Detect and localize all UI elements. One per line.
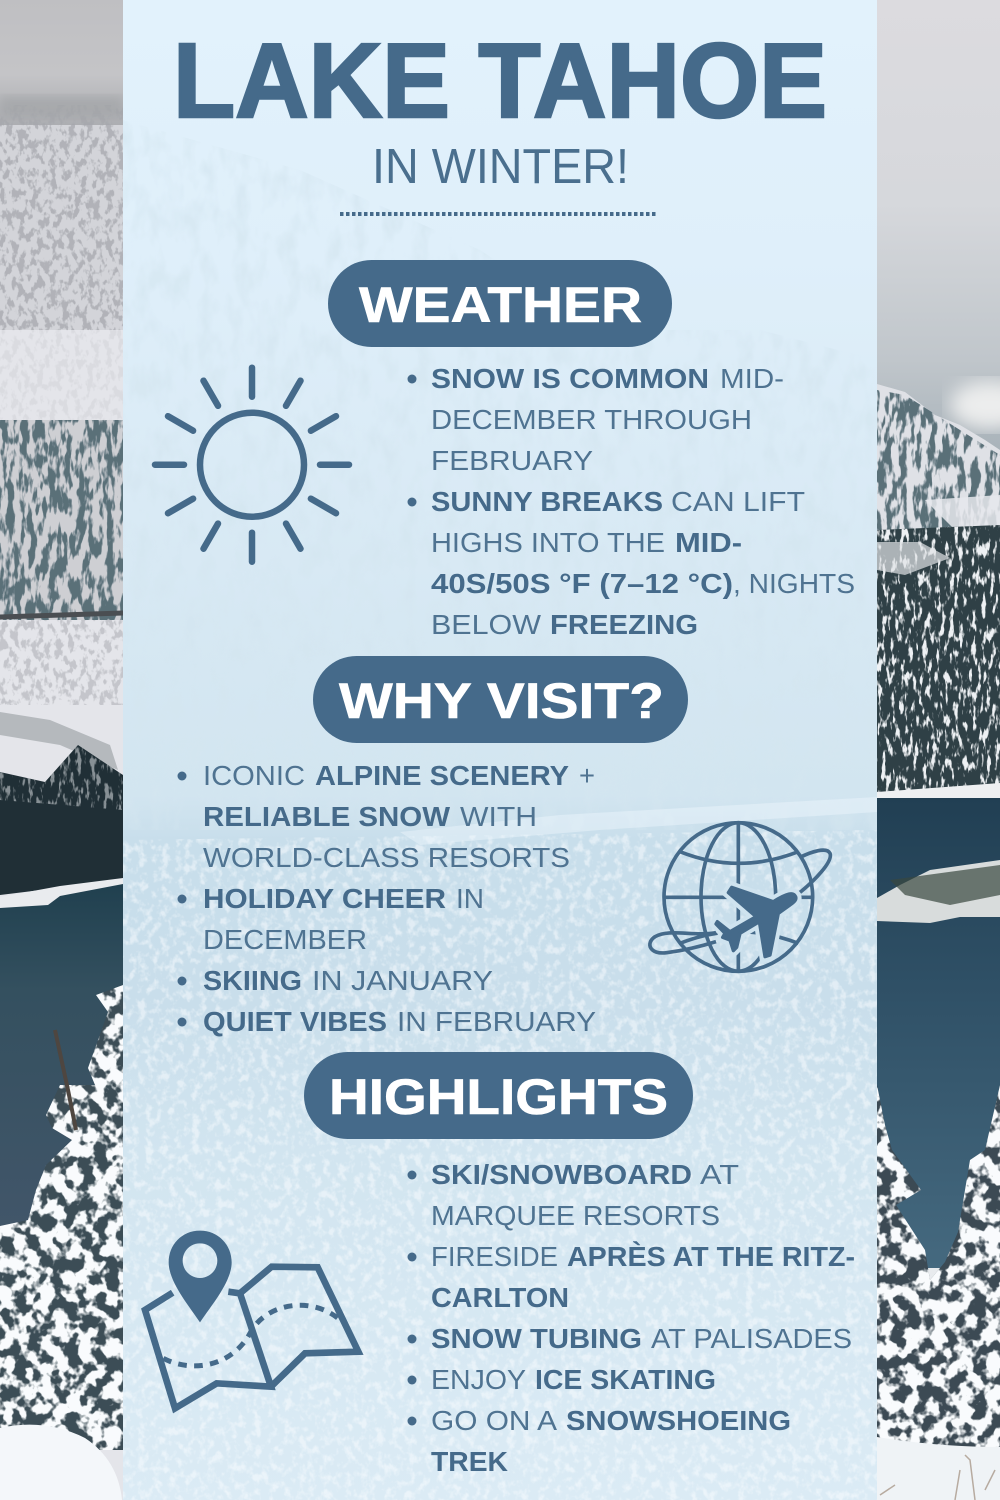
why visit bullet list: DECEMBER bbox=[203, 924, 367, 955]
dotted divider bbox=[340, 212, 657, 216]
highlights bullet list: CARLTON bbox=[431, 1282, 569, 1313]
highlights bullet list: APRÈS AT THE RITZ- bbox=[567, 1241, 855, 1272]
highlights bullet list: ENJOY bbox=[431, 1364, 526, 1395]
weather bullet list: CAN LIFT bbox=[671, 486, 805, 517]
snow bank bbox=[877, 1437, 1000, 1500]
weather bullet list: DECEMBER THROUGH bbox=[431, 404, 752, 435]
heading: weather: WEATHER bbox=[359, 277, 642, 333]
left sky bbox=[0, 0, 123, 125]
weather bullet list: SNOW IS COMMON bbox=[431, 363, 709, 394]
rock bluff and dark shore forest bbox=[0, 712, 123, 909]
weather bullet list: SUNNY BREAKS bbox=[431, 486, 663, 517]
right base snow bbox=[877, 0, 1000, 1500]
right lake bbox=[877, 798, 1000, 1268]
why visit bullet list: WITH bbox=[460, 801, 537, 832]
highlights bullet list: SNOWSHOEING bbox=[566, 1405, 791, 1436]
background photo: left side bbox=[0, 0, 123, 1500]
highlights bullet list bbox=[408, 1159, 855, 1477]
right forest mountain bbox=[877, 384, 1000, 804]
why visit bullet list bbox=[178, 760, 596, 1037]
highlights bullet list: GO ON A bbox=[431, 1405, 557, 1436]
why visit bullet list: IN FEBRUARY bbox=[397, 1006, 596, 1037]
heading: why visit: WHY VISIT? bbox=[339, 673, 664, 729]
highlights bullet list: ICE SKATING bbox=[535, 1364, 716, 1395]
weather bullet list: FREEZING bbox=[550, 609, 698, 640]
title bbox=[173, 22, 827, 194]
weather bullet list: 40S/50S °F (7–12 °C) bbox=[431, 568, 733, 599]
why visit bullet list: QUIET VIBES bbox=[203, 1006, 387, 1037]
snow mound bbox=[0, 1425, 122, 1500]
highlights bullet list: SKI/SNOWBOARD bbox=[431, 1159, 692, 1190]
left base snow bbox=[0, 0, 123, 1500]
icon: sun bbox=[155, 368, 349, 562]
heading: highlights: HIGHLIGHTS bbox=[329, 1069, 668, 1125]
icon: map with location pin bbox=[145, 1231, 358, 1408]
weather bullet list bbox=[408, 363, 855, 640]
weather bullet list: MID- bbox=[675, 527, 742, 558]
why visit bullet list: SKIING bbox=[203, 965, 302, 996]
right island bbox=[877, 860, 1000, 923]
highlights bullet list: AT bbox=[700, 1159, 739, 1190]
panel: highlights bbox=[145, 1052, 855, 1477]
panel: why visit bbox=[178, 656, 830, 1037]
icon: globe with airplane bbox=[650, 823, 830, 971]
heading: highlights bbox=[304, 1052, 693, 1139]
why visit bullet list: ICONIC bbox=[203, 760, 305, 791]
weather bullet list: , NIGHTS bbox=[733, 568, 855, 599]
highlights bullet list: SNOW TUBING bbox=[431, 1323, 642, 1354]
translucent centre panel bbox=[123, 0, 877, 1500]
left foreground firs with snow bbox=[0, 985, 123, 1500]
why visit bullet list: IN JANUARY bbox=[312, 965, 493, 996]
weather bullet list: MID- bbox=[720, 363, 784, 394]
highlights bullet list: TREK bbox=[431, 1446, 508, 1477]
panel: weather bbox=[155, 260, 855, 640]
weather bullet list: BELOW bbox=[431, 609, 542, 640]
highlights bullet list: MARQUEE RESORTS bbox=[431, 1200, 720, 1231]
heading: why visit bbox=[313, 656, 688, 743]
why visit bullet list: WORLD-CLASS RESORTS bbox=[203, 842, 570, 873]
why visit bullet list: + bbox=[579, 760, 595, 791]
left lake bbox=[0, 884, 123, 1240]
right sky bbox=[877, 0, 1000, 450]
heading: weather bbox=[328, 260, 672, 347]
weather bullet list: HIGHS INTO THE bbox=[431, 527, 665, 558]
left mountain slope bbox=[0, 96, 123, 705]
title: IN WINTER! bbox=[372, 140, 629, 194]
right foreground firs with snow bbox=[877, 1085, 1000, 1500]
highlights bullet list: FIRESIDE bbox=[431, 1241, 558, 1272]
why visit bullet list: RELIABLE SNOW bbox=[203, 801, 451, 832]
highlights bullet list: AT PALISADES bbox=[651, 1323, 852, 1354]
title: LAKE TAHOE bbox=[173, 22, 827, 140]
road cut bbox=[0, 613, 123, 617]
why visit bullet list: IN bbox=[456, 883, 484, 914]
weather bullet list: FEBRUARY bbox=[431, 445, 593, 476]
background photo: right side bbox=[877, 0, 1000, 1500]
why visit bullet list: HOLIDAY CHEER bbox=[203, 883, 446, 914]
why visit bullet list: ALPINE SCENERY bbox=[315, 760, 569, 791]
